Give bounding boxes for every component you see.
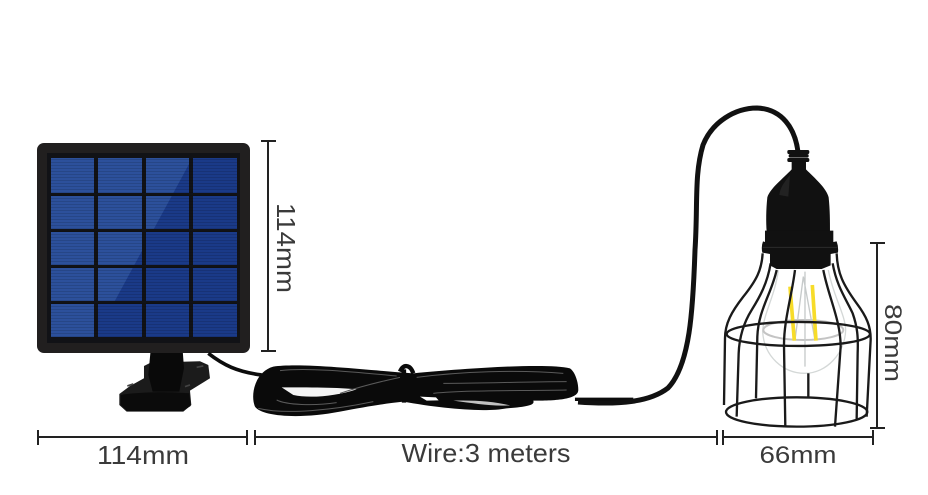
- icon: caged lamp: [724, 150, 871, 427]
- bulb: [763, 270, 846, 373]
- solar lamp dimension infographic: [37, 106, 902, 464]
- dimension: panel height 114mm: 114mm: [271, 203, 301, 293]
- dimension: panel width 114mm: 114mm: [97, 440, 189, 470]
- dimension: lamp height 80mm: [870, 243, 906, 428]
- cage wires: [724, 253, 871, 427]
- dimension: lamp height 80mm: 80mm: [879, 304, 906, 382]
- icon: solar panel stand: [119, 350, 210, 412]
- dimension: lamp width 66mm: [723, 430, 873, 469]
- dimension: panel height 114mm: [261, 141, 301, 351]
- icon: lamp cable: [578, 108, 798, 403]
- solar cells: [51, 158, 237, 337]
- icon: solar panel: [37, 143, 250, 353]
- dimension: panel width 114mm: [38, 430, 247, 470]
- icon: coiled wire: [208, 353, 633, 416]
- dimension: wire 3 meters: [255, 430, 717, 468]
- dimension: lamp width 66mm: 66mm: [760, 442, 836, 469]
- dimension: wire 3 meters: Wire:3 meters: [402, 438, 570, 468]
- panel glare: [51, 158, 189, 337]
- lamp socket: [762, 150, 838, 269]
